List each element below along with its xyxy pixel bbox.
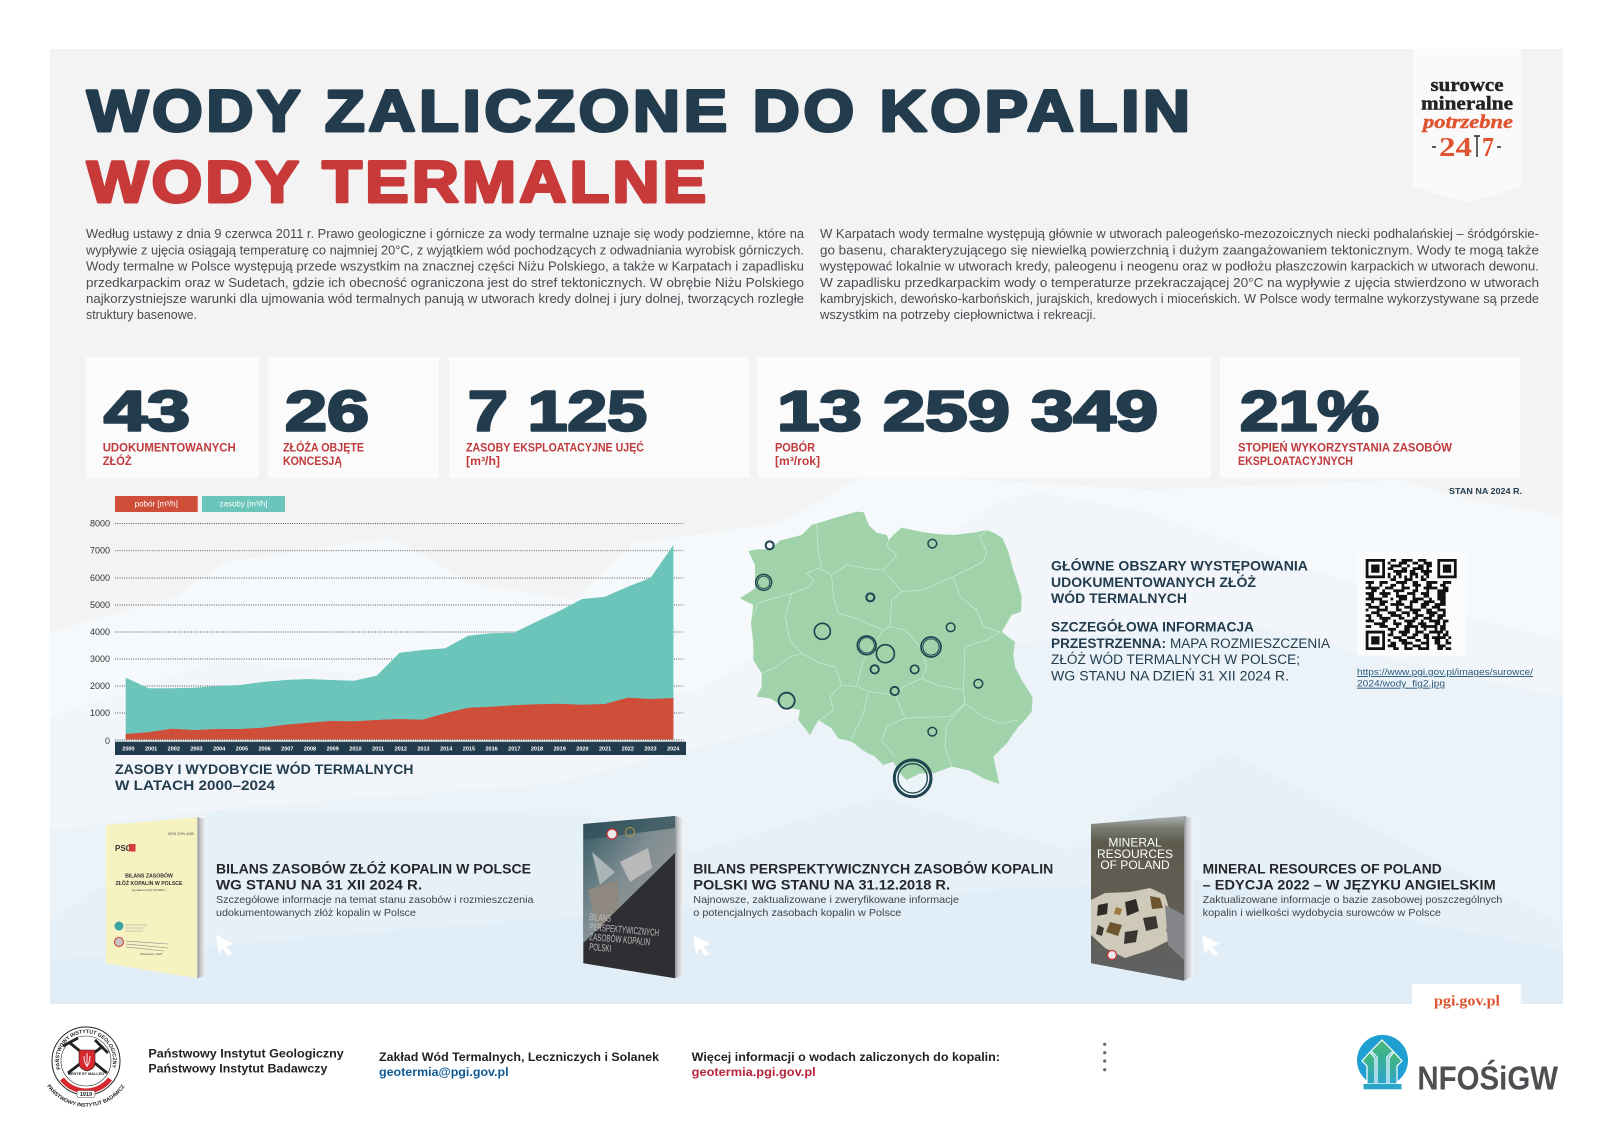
logo: PGI: PAŃSTWOWY INSTYTUT GEOLOGICZNY [54,1030,117,1070]
area chart: resources and extraction: 7000 [90,546,110,556]
book cover: Bilans zasobów [106,817,206,978]
area chart: resources and extraction: 2010 [349,746,362,752]
area chart: resources and extraction: 6000 [90,573,110,583]
website tab: pgi.gov.pl [1434,994,1500,1010]
stat card: 21%: EKSPLOATACYJNYCH [1238,456,1353,468]
stat card: 13 259 349: [m³/rok] [775,456,820,468]
area chart: resources and extraction: 5000 [90,600,110,610]
book 1 description: WG STANU NA 31 XII 2024 R. [216,878,422,893]
stat card: 26: ZŁÓŻA OBJĘTE [283,442,364,455]
book 1 description: Szczegółowe informacje na temat stanu zasobów i rozmieszczenia [216,894,534,906]
area chart: resources and extraction: 2013 [417,746,430,752]
book cover: Mineral Resources of Poland: MINERAL [1108,836,1162,850]
area chart: resources and extraction: 2021 [599,746,611,752]
book cover: Mineral Resources of Poland [1091,816,1193,981]
book 1 description: BILANS ZASOBÓW ZŁÓŻ KOPALIN W POLSCE [216,861,531,876]
stat card: 21% [1220,357,1520,478]
book cover: Bilans zasobów: PSG [115,844,132,853]
book cover: Bilans zasobów: Warszawa, 2025 [140,952,163,956]
badge: surowce mineralne potrzebne 24/7: 24 [1439,132,1472,162]
text block: left column: przedkarpackim oraz w Sudetach, gdzie ich obecność ograniczona jest do stref tektonicznych. W obrębie Niżu Polskiego [86,276,804,290]
footer: more information: geotermia.pgi.gov.pl [692,1065,816,1079]
chart title: W LATACH 2000–2024 [115,778,276,793]
area chart: resources and extraction: 2001 [145,746,157,752]
stat card: 7 125: 7 125 [468,380,647,444]
area chart: resources and extraction: 2020 [576,746,589,752]
area chart: resources and extraction: 2012 [395,746,407,752]
text block: left column [85,227,804,322]
book 3 description: kopalin i wielkości wydobycia surowców w Polsce [1203,907,1441,919]
area chart: resources and extraction: 2009 [327,746,339,752]
area chart: resources and extraction: 2005 [236,746,248,752]
footer: more information [692,1050,1000,1079]
area chart: resources and extraction: 2016 [485,746,498,752]
text block: left column: struktury basenowe. [86,308,197,322]
book cover: Bilans perspektywicznych: POLSKI [589,942,612,955]
area chart: resources and extraction: 2007 [281,746,293,752]
panel: background with mountain shapes [50,49,1563,1004]
book 2 description: o potencjalnych zasobach kopalin w Polsce [693,907,901,919]
stat card: 7 125: [m³/h] [466,456,500,468]
chart title [115,762,414,793]
text block: left column: Według ustawy z dnia 9 czerwca 2011 r. Prawo geologiczne i górnicze za wody termalne uznaje się wody podziemne, które na [86,227,804,241]
text block: right column: występować lokalnie w utworach kredy, paleogenu i neogenu oraz w podłożu płaszczowin karpackich w utworach dewonu. [819,260,1539,274]
area chart: resources and extraction: 2000 [90,681,110,691]
area chart: resources and extraction: 2019 [554,746,566,752]
area chart: resources and extraction: 2011 [372,746,384,752]
footer: more information: Więcej informacji o wodach zaliczonych do kopalin: [692,1050,1000,1064]
book 2 description: BILANS PERSPEKTYWICZNYCH ZASOBÓW KOPALIN [693,861,1053,876]
area chart: resources and extraction: 2024 [667,746,680,752]
stat card: 26: KONCESJĄ [283,456,342,468]
badge: surowce mineralne potrzebne 24/7: 7 [1482,132,1494,162]
area chart: resources and extraction: 2015 [463,746,475,752]
stat card: 21%: 21% [1240,380,1379,444]
book 2 description: POLSKI WG STANU NA 31.12.2018 R. [693,878,950,893]
website tab [1412,984,1521,1010]
title: WODY TERMALNE [87,150,706,215]
footer dots [1103,1043,1106,1071]
chart title: ZASOBY I WYDOBYCIE WÓD TERMALNYCH [115,762,414,777]
book cover: Bilans perspektywicznych [583,816,683,978]
logo: NFOŚiGW [1357,1035,1559,1096]
icon: cursor arrow [1202,935,1220,956]
area chart: resources and extraction: 2014 [440,746,453,752]
chart legend: zasoby [m³/h] [219,500,268,508]
stat card: 26 [268,357,439,478]
map description: UDOKUMENTOWANYCH ZŁÓŻ [1051,575,1256,590]
area chart: resources and extraction: 2000 [122,746,135,752]
text block: right column: wszystkim na potrzeby ciepłownictwa i rekreacji. [819,308,1096,322]
text block: left column: wypływie z ujęcia osiągają temperaturę co najmniej 20°C, z wyjątkiem wód pochodzących z odwadniania wyrobisk górniczych. [85,243,804,257]
badge: surowce mineralne potrzebne 24/7: mineralne [1421,94,1513,114]
logo: PGI: MENTE ET MALLEO [68,1072,104,1076]
text block: right column: W Karpatach wody termalne występują głównie w utworach paleogeńsko-mezozoicznych niecki podhalańskiej – śródgórskie- [820,227,1539,241]
stat card: 7 125 [449,357,750,478]
text block: left column: najkorzystniejsze warunki dla ujmowania wód termalnych panują w utworach kredy dolnej i jury dolnej, tworzących rozległe [86,292,804,306]
link to map: https://www.pgi.gov.pl/images/surowce/ [1357,667,1533,678]
book 2 description: Najnowsze, zaktualizowane i zweryfikowane informacje [693,894,959,906]
badge: surowce mineralne potrzebne 24/7: potrzebne [1421,112,1514,133]
area chart: resources and extraction: 1000 [90,708,110,718]
icon: cursor arrow [693,935,711,956]
book 1 description: udokumentowanych złóż kopalin w Polsce [216,907,416,919]
badge: surowce mineralne potrzebne 24/7: surowce [1430,75,1504,96]
text block: right column: go basenu, charakteryzującego się niewielką powierzchnią i dużym zaangażowaniem tektonicznym. Wody te mogą także [820,243,1539,257]
area chart: resources and extraction: 2003 [190,746,203,752]
area chart: resources and extraction: 8000 [90,518,110,528]
map description: PRZESTRZENNA: [1051,636,1166,651]
map description: WÓD TERMALNYCH [1051,591,1187,606]
map description [1051,559,1330,684]
stat card: 43: UDOKUMENTOWANYCH [103,443,236,455]
area chart: resources and extraction: 2006 [258,746,271,752]
stat card: 43: 43 [104,380,190,444]
footer: institute name: Państwowy Instytut Badawczy [148,1062,328,1076]
area chart: resources and extraction: 2017 [508,746,520,752]
book 2 description [693,861,1053,919]
stat card: 21%: STOPIEŃ WYKORZYSTANIA ZASOBÓW [1238,442,1452,455]
book 1 description [216,861,534,919]
stat card: 26: 26 [285,380,369,444]
link to map [1357,667,1533,690]
book cover: Bilans zasobów: wg stanu na 31 XII 2024 r. [132,888,167,892]
map description: GŁÓWNE OBSZARY WYSTĘPOWANIA [1051,559,1308,574]
footer: department contact: geotermia@pgi.gov.pl [379,1065,509,1079]
logo: PGI: PAŃSTWOWY INSTYTUT BADAWCZY [47,1084,125,1107]
map description: WG STANU NA DZIEŃ 31 XII 2024 R. [1051,669,1289,684]
book cover: Bilans zasobów: ISSN 2299-4459 [168,832,194,836]
area chart: resources and extraction: 2004 [213,746,226,752]
book 3 description: – EDYCJA 2022 – W JĘZYKU ANGIELSKIM [1203,878,1496,893]
area chart: resources and extraction: 2022 [622,746,634,752]
area chart: resources and extraction: 4000 [90,627,110,637]
area chart: resources and extraction: 2002 [168,746,180,752]
logo: NFOŚiGW: NFOŚiGW [1417,1059,1559,1096]
chart legend: pobór [m³/h] [135,500,178,508]
book cover: Bilans perspektywicznych: ZASOBÓW KOPALIN [589,930,651,948]
area chart: resources and extraction [90,518,686,755]
area chart: resources and extraction: 2023 [644,746,657,752]
map of Poland with thermal water deposits [740,512,1033,797]
stat card: 43: ZŁÓŻ [103,455,132,468]
text block: left column: Wody termalne w Polsce występują przede wszystkim na znacznej części Niżu Polskiego, a także w Karpatach i zapadlisku [86,260,804,274]
text block: right column: W zapadlisku przedkarpackim wody o temperaturze przekraczającej 20°C na wypływie z ujęcia stwierdzono w utworach [820,276,1539,290]
stat card: 13 259 349: POBÓR [775,442,816,455]
book cover: Mineral Resources of Poland: OF POLAND [1100,858,1170,872]
area chart: resources and extraction: 2008 [304,746,316,752]
area chart: resources and extraction: 0 [105,736,110,746]
link to map: 2024/wody_fig2.jpg [1357,679,1445,690]
title: WODY ZALICZONE DO KOPALIN [87,79,1190,144]
book 3 description: Zaktualizowane informacje o bazie zasobowej poszczególnych [1203,894,1502,906]
book cover: Bilans zasobów: ZŁÓŻ KOPALIN W POLSCE [115,879,183,887]
logo: PGI [47,1026,125,1107]
area chart: resources and extraction: 3000 [90,654,110,664]
book 3 description [1203,861,1502,919]
chart legend [115,496,285,512]
footer: department contact [379,1050,659,1079]
book cover: Bilans perspektywicznych: BILANS [589,912,612,925]
title [87,79,1190,215]
text block: right column: kambryjskich, dewońsko-karbońskich, jurajskich, kredowych i mioceńskich. W Polsce wody termalne wykorzystywane są przede [820,292,1539,306]
stat card: 43 [86,357,259,478]
book cover: Bilans perspektywicznych: PERSPEKTYWICZNYCH [589,922,659,939]
map description: ZŁÓŻ WÓD TERMALNYCH W POLSCE; [1051,652,1300,667]
map description: SZCZEGÓŁOWA INFORMACJA [1051,620,1254,635]
footer: institute name [148,1047,344,1076]
icon: cursor arrow [216,935,234,956]
book 3 description: MINERAL RESOURCES OF POLAND [1203,861,1442,876]
badge: surowce mineralne potrzebne 24/7 [1413,49,1521,202]
footer: institute name: Państwowy Instytut Geologiczny [148,1047,344,1061]
date note: STAN NA 2024 R. [1449,486,1522,496]
map description: MAPA ROZMIESZCZENIA [1170,636,1330,651]
stat card: 7 125: ZASOBY EKSPLOATACYJNE UJĘĆ [466,442,644,455]
book cover: Mineral Resources of Poland: RESOURCES [1097,847,1173,861]
footer: department contact: Zakład Wód Termalnych, Leczniczych i Solanek [379,1050,659,1064]
text block: right column [819,227,1539,322]
stat card: 13 259 349: 13 259 349 [777,380,1158,444]
QR code [1357,551,1466,656]
book cover: Bilans zasobów: BILANS ZASOBÓW [125,872,173,880]
area chart: resources and extraction: 2018 [531,746,543,752]
logo: PGI: 1919 [80,1092,92,1098]
stat card: 13 259 349 [758,357,1211,478]
